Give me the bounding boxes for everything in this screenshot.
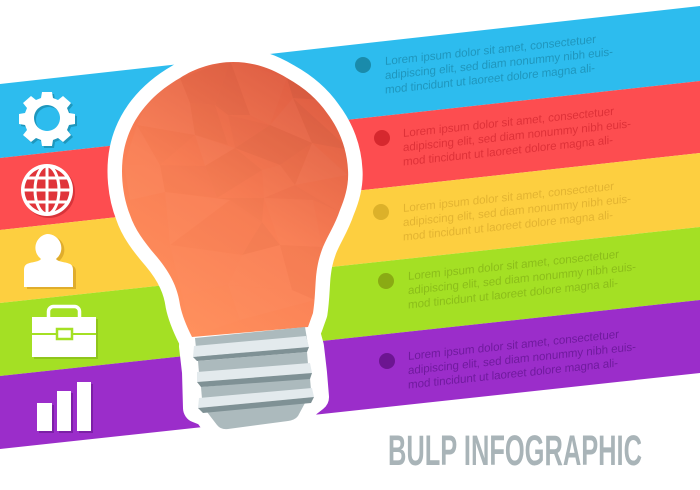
- light bulb: [110, 50, 360, 429]
- icon: globe: [21, 164, 75, 218]
- item 4: green bullet and text: adipiscing elit, sed diam nonummy nibh euis-: [408, 260, 636, 297]
- lamp base: [193, 327, 314, 429]
- panel: yellow band: [0, 153, 700, 303]
- item 3: yellow bullet and text: [373, 178, 631, 244]
- item 4: green bullet and text: mod tincidunt ut laoreet dolore magna ali-: [408, 277, 618, 312]
- item 2: red bullet and text: adipiscing elit, sed diam nonummy nibh euis-: [403, 117, 631, 154]
- bulb white outline: [122, 62, 348, 429]
- item 3: yellow bullet and text: Lorem ipsum dolor sit amet, consectetuer: [403, 180, 614, 215]
- panel: red band: [0, 81, 700, 230]
- icon: gear: [19, 92, 77, 148]
- icon: briefcase: [32, 306, 98, 359]
- bulb glass with low-poly facets: [122, 62, 348, 337]
- panel: purple band: [0, 300, 700, 449]
- item 1: blue bullet and text: adipiscing elit, sed diam nonummy nibh euis-: [385, 45, 613, 82]
- panel: green band: [0, 227, 700, 376]
- icon: bar chart: [37, 382, 93, 433]
- item 1: blue bullet and text: [355, 31, 613, 97]
- item 2: red bullet and text: mod tincidunt ut laoreet dolore magna ali-: [403, 134, 613, 169]
- item 1: blue bullet and text: mod tincidunt ut laoreet dolore magna ali-: [385, 62, 595, 97]
- icon: person: [24, 234, 76, 289]
- item 2: red bullet and text: Lorem ipsum dolor sit amet, consectetuer: [403, 105, 614, 140]
- item 3: yellow bullet and text: mod tincidunt ut laoreet dolore magna ali-: [403, 209, 613, 244]
- item 2: red bullet and text: [374, 103, 631, 169]
- item 5: purple bullet and text: [379, 326, 636, 392]
- item 5: purple bullet and text: adipiscing elit, sed diam nonummy nibh euis-: [408, 340, 636, 377]
- item 5: purple bullet and text: Lorem ipsum dolor sit amet, consectetuer: [408, 328, 619, 363]
- item 4: green bullet and text: Lorem ipsum dolor sit amet, consectetuer: [408, 248, 619, 283]
- panel: blue band: [0, 6, 700, 158]
- item 5: purple bullet and text: mod tincidunt ut laoreet dolore magna ali-: [408, 357, 618, 392]
- item 1: blue bullet and text: Lorem ipsum dolor sit amet, consectetuer: [385, 33, 596, 68]
- item 3: yellow bullet and text: adipiscing elit, sed diam nonummy nibh euis-: [403, 192, 631, 229]
- item 4: green bullet and text: [378, 246, 636, 312]
